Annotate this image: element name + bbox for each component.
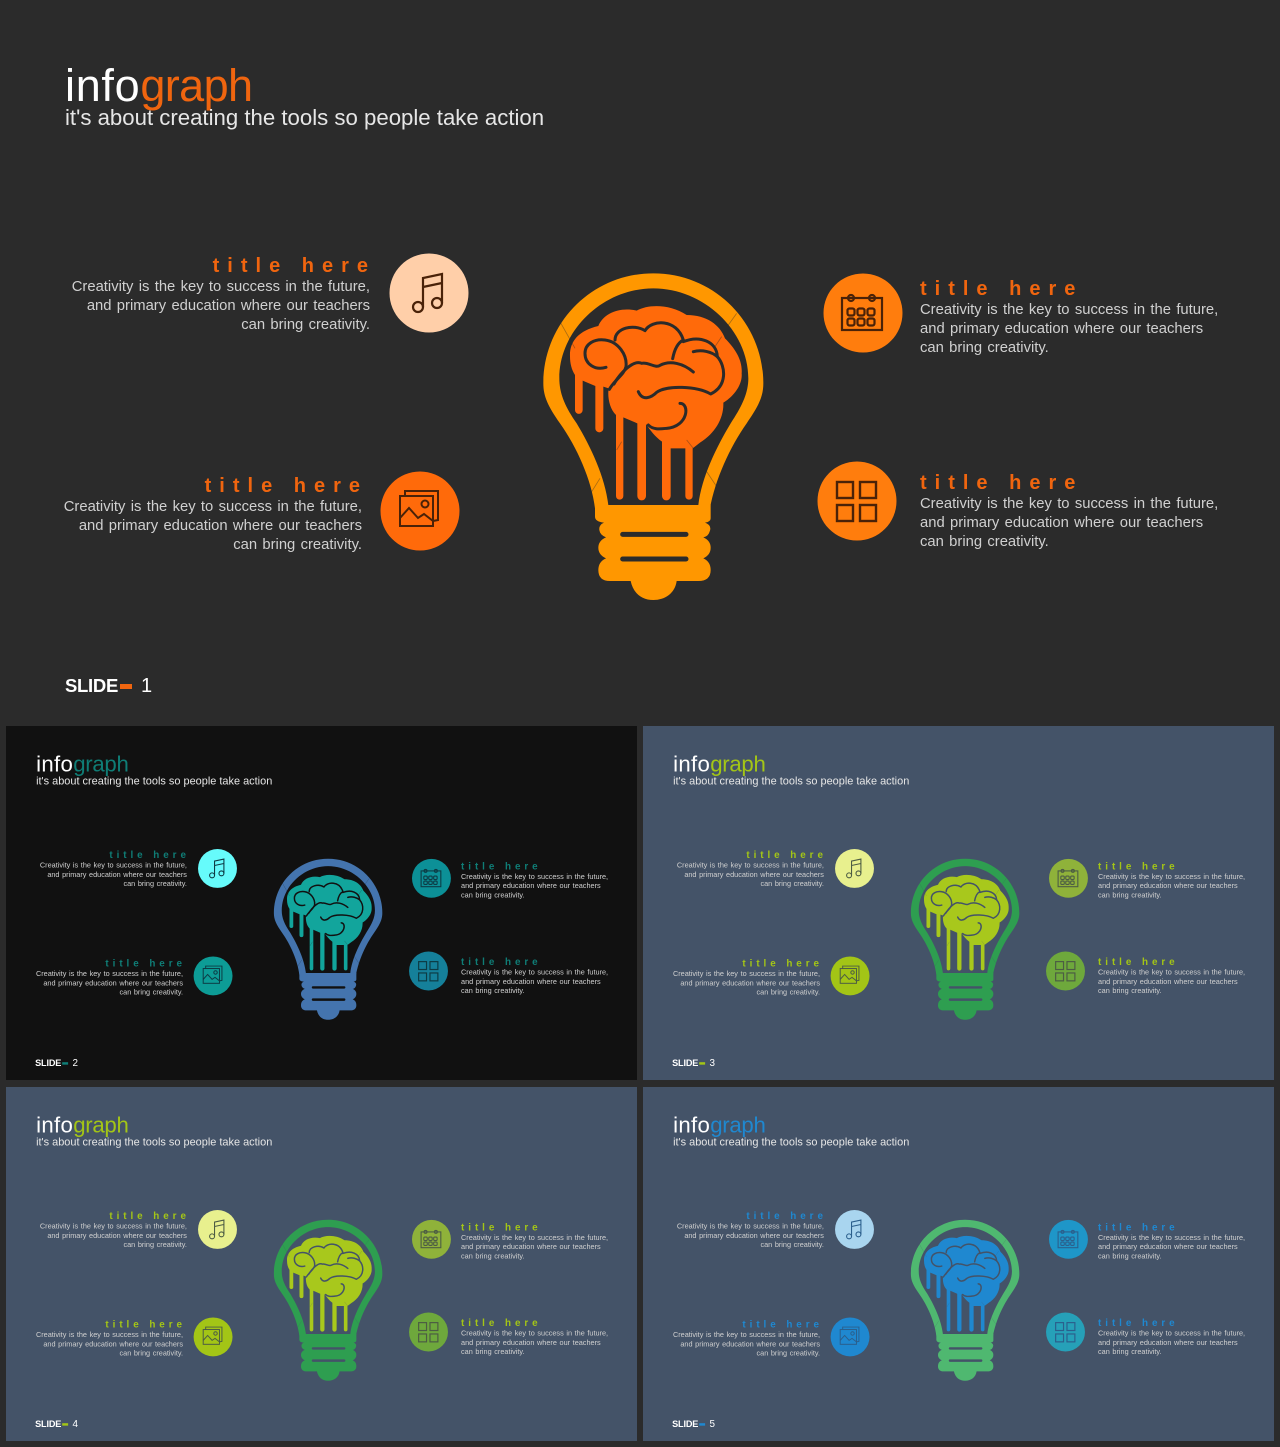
text block: bottom left: Creativity is the key to success in the future, <box>64 499 362 515</box>
heading: slide 1 title: it's about creating the tools so people take action <box>65 105 544 130</box>
text block: top left: can bring creativity. <box>123 1241 187 1249</box>
slide number: SLIDE <box>35 1058 61 1068</box>
icon: image circle <box>380 472 460 550</box>
text block: bottom right: Creativity is the key to success in the future, <box>1098 969 1245 976</box>
text block: top right: title here <box>1098 1222 1179 1233</box>
text block: bottom right: can bring creativity. <box>1098 987 1162 995</box>
text block: top right <box>1098 861 1245 900</box>
text block: top left: title here <box>746 850 827 861</box>
text block: bottom right <box>920 472 1218 550</box>
text block: bottom left: title here <box>105 1319 186 1330</box>
icon: calendar circle <box>824 274 902 352</box>
text block: top right: title here <box>461 861 542 872</box>
text block: top right: title here <box>461 1222 542 1233</box>
text block: top right: can bring creativity. <box>1098 1253 1162 1261</box>
text block: top right <box>461 861 608 900</box>
slide number <box>672 1418 716 1430</box>
slide number: SLIDE <box>672 1419 698 1429</box>
icon: grid circle <box>409 1312 448 1352</box>
text block: top left: title here <box>746 1211 827 1222</box>
slide number <box>672 1058 715 1069</box>
text block: top left <box>666 1210 824 1251</box>
text block: top left: and primary education where our teachers <box>47 1232 187 1240</box>
text block: top left: and primary education where our teachers <box>87 298 370 314</box>
text block: top left: and primary education where our teachers <box>684 1232 824 1240</box>
text block: bottom left: title here <box>742 1319 823 1330</box>
icon: grid circle <box>818 462 896 540</box>
icon: image circle <box>830 1317 870 1357</box>
text block: bottom right: Creativity is the key to success in the future, <box>461 969 608 976</box>
panel: slide 1 <box>0 0 1280 724</box>
text block: top right: and primary education where our teachers <box>1098 1243 1238 1251</box>
text block: bottom right <box>461 1317 619 1358</box>
slide number: 2 <box>73 1058 78 1069</box>
heading: slide 2 title <box>36 751 272 787</box>
slide number: 5 <box>710 1419 715 1430</box>
text block: top right: title here <box>1098 861 1179 872</box>
text block: top left: title here <box>109 1211 190 1222</box>
text block: bottom right: Creativity is the key to success in the future, <box>461 1330 608 1337</box>
text block: top left: Creativity is the key to success in the future, <box>677 1223 824 1230</box>
text block: bottom right <box>461 957 608 995</box>
text block: top left <box>72 255 376 333</box>
panel: slide 2 <box>6 726 637 1080</box>
text block: top left: can bring creativity. <box>123 880 187 888</box>
heading: slide 5 title: infograph <box>673 1112 765 1137</box>
text block: bottom left <box>64 475 368 553</box>
text block: bottom right <box>1098 1317 1256 1358</box>
icon: music circle <box>835 849 874 888</box>
icon: music circle <box>198 1210 237 1249</box>
text block: top left: Creativity is the key to success in the future, <box>72 279 370 295</box>
slide number <box>65 675 152 697</box>
text block: top left <box>677 850 827 888</box>
text block: bottom right: and primary education where our teachers <box>461 978 601 986</box>
text block: top right: can bring creativity. <box>461 1253 525 1261</box>
text block: bottom left: and primary education where our teachers <box>79 518 362 534</box>
icon: music circle <box>835 1210 874 1249</box>
slide number <box>35 1058 78 1069</box>
text block: bottom left: and primary education where our teachers <box>43 979 183 987</box>
heading: slide 4 title: it's about creating the tools so people take action <box>36 1136 272 1148</box>
text block: bottom right <box>1098 957 1245 995</box>
text block: bottom right: Creativity is the key to success in the future, <box>920 496 1218 512</box>
icon: grid circle <box>409 952 448 990</box>
text block: top right: and primary education where our teachers <box>920 321 1203 337</box>
text block: top left: Creativity is the key to success in the future, <box>40 862 187 869</box>
text block: bottom left: can bring creativity. <box>119 1350 183 1358</box>
text block: bottom right: can bring creativity. <box>461 1348 525 1356</box>
text block: bottom left: Creativity is the key to success in the future, <box>673 970 820 978</box>
slide number: 4 <box>73 1419 78 1430</box>
heading: slide 4 title: infograph <box>36 1112 128 1137</box>
text block: top left: title here <box>213 255 376 277</box>
icon: music circle <box>390 254 468 332</box>
heading: slide 4 title <box>36 1112 272 1148</box>
text block: bottom left: Creativity is the key to success in the future, <box>36 1331 183 1339</box>
text block: top left: can bring creativity. <box>760 1241 824 1249</box>
text block: bottom left: Creativity is the key to success in the future, <box>36 970 183 978</box>
slide number: SLIDE <box>65 675 118 696</box>
text block: top right: can bring creativity. <box>461 892 525 900</box>
text block: top left: can bring creativity. <box>241 317 370 333</box>
light bulb with brain illustration <box>643 1085 1274 1445</box>
text block: top right: and primary education where our teachers <box>1098 882 1238 890</box>
text block: bottom right: title here <box>461 1318 542 1329</box>
text block: top right: and primary education where our teachers <box>461 1243 601 1251</box>
text block: top right: Creativity is the key to success in the future, <box>1098 873 1245 881</box>
text block: top left: Creativity is the key to success in the future, <box>40 1223 187 1230</box>
heading: slide 2 title: infograph <box>36 751 128 776</box>
heading: slide 3 title: infograph <box>673 751 765 776</box>
light bulb with brain illustration <box>274 1220 382 1381</box>
text block: bottom left: Creativity is the key to success in the future, <box>673 1331 820 1339</box>
text block: top left <box>40 1211 190 1249</box>
text block: bottom right: and primary education where our teachers <box>1098 1339 1238 1347</box>
icon: grid circle <box>1046 1312 1085 1352</box>
slide number: 1 <box>141 675 152 697</box>
panel: slide 5 <box>643 1087 1274 1441</box>
slide number: SLIDE <box>35 1419 61 1429</box>
heading: slide 1 title: infograph <box>65 60 252 111</box>
text block: bottom right: can bring creativity. <box>461 987 525 995</box>
icon: grid circle <box>1046 952 1085 990</box>
text block: top left: title here <box>109 850 190 861</box>
text block: bottom right: Creativity is the key to success in the future, <box>1098 1330 1245 1337</box>
panel: slide 4 <box>6 1087 637 1441</box>
text block: bottom right: and primary education where our teachers <box>461 1339 601 1347</box>
icon: calendar circle <box>412 858 451 898</box>
icon: image circle <box>194 1318 232 1356</box>
text block: bottom right: title here <box>461 957 542 968</box>
text block: top left: and primary education where our teachers <box>47 871 187 879</box>
slide number: SLIDE <box>672 1058 698 1068</box>
text block: bottom right: can bring creativity. <box>1098 1348 1162 1356</box>
text block: bottom left: and primary education where our teachers <box>43 1340 183 1348</box>
text block: top right: Creativity is the key to success in the future, <box>1098 1234 1245 1242</box>
text block: bottom left: title here <box>205 475 368 497</box>
icon: image circle <box>830 956 870 996</box>
slide number: 3 <box>710 1058 715 1069</box>
heading: slide 1 title <box>65 60 544 130</box>
text block: bottom right: title here <box>1098 957 1179 968</box>
icon: calendar circle <box>1049 1220 1088 1259</box>
light bulb with brain illustration <box>910 858 1020 1020</box>
text block: top right: can bring creativity. <box>920 340 1049 356</box>
light bulb with brain illustration <box>274 858 382 1020</box>
text block: top right <box>1098 1222 1256 1262</box>
slide number <box>35 1418 79 1430</box>
panel: slide 3 <box>643 726 1274 1080</box>
text block: top left: and primary education where our teachers <box>684 871 824 879</box>
text block: bottom left: title here <box>742 958 823 969</box>
text block: bottom left <box>25 1319 183 1359</box>
icon: music circle <box>198 849 237 888</box>
text block: bottom left: title here <box>105 958 186 969</box>
text block: top left <box>40 850 190 888</box>
heading: slide 3 title <box>673 751 909 787</box>
text block: top left: Creativity is the key to success in the future, <box>677 862 824 869</box>
text block: bottom left: and primary education where our teachers <box>680 979 820 987</box>
text block: bottom right: title here <box>920 472 1083 494</box>
text block: top left: can bring creativity. <box>760 880 824 888</box>
text block: bottom right: and primary education where our teachers <box>920 515 1203 531</box>
text block: bottom left: and primary education where our teachers <box>680 1340 820 1348</box>
text block: bottom left <box>36 958 186 997</box>
heading: slide 3 title: it's about creating the tools so people take action <box>673 775 909 787</box>
icon: calendar circle <box>412 1220 451 1259</box>
icon: image circle <box>194 956 232 996</box>
text block: bottom left <box>673 958 823 997</box>
text block: top right: can bring creativity. <box>1098 892 1162 900</box>
text block: bottom right: can bring creativity. <box>920 534 1049 550</box>
text block: top right: Creativity is the key to success in the future, <box>920 302 1218 318</box>
text block: top right: and primary education where our teachers <box>461 882 601 890</box>
icon: calendar circle <box>1049 858 1088 898</box>
heading: slide 5 title: it's about creating the tools so people take action <box>673 1136 909 1148</box>
text block: top right: Creativity is the key to success in the future, <box>461 1234 608 1242</box>
heading: slide 5 title <box>673 1113 929 1151</box>
text block: bottom left: can bring creativity. <box>233 537 362 553</box>
text block: top right: title here <box>920 278 1083 300</box>
text block: bottom left: can bring creativity. <box>119 989 183 997</box>
text block: bottom left: can bring creativity. <box>756 1350 820 1358</box>
heading: slide 2 title: it's about creating the tools so people take action <box>36 775 272 787</box>
text block: bottom left <box>662 1319 820 1359</box>
text block: top right <box>461 1222 619 1262</box>
text block: bottom right: and primary education where our teachers <box>1098 978 1238 986</box>
text block: top right <box>920 278 1218 356</box>
light bulb with brain illustration <box>543 273 764 600</box>
text block: bottom left: can bring creativity. <box>756 989 820 997</box>
text block: bottom right: title here <box>1098 1318 1179 1329</box>
text block: top right: Creativity is the key to success in the future, <box>461 873 608 881</box>
